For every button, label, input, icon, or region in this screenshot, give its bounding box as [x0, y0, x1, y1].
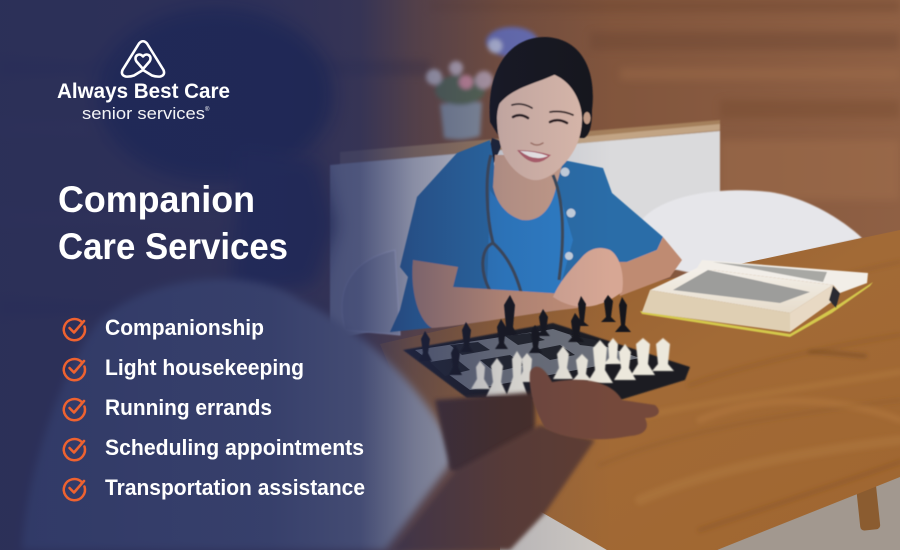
icon: logo triangle with heart — [122, 41, 164, 77]
foreground person — [22, 7, 659, 550]
item: Companionship: Companionship — [105, 315, 264, 340]
white cabinet with shelf — [330, 120, 720, 340]
collar shadow behind neck — [485, 138, 503, 172]
floor — [500, 500, 607, 550]
table with wood grain — [380, 230, 900, 550]
title: Care Services — [58, 226, 288, 267]
logo — [57, 41, 230, 123]
fringe — [492, 48, 588, 115]
hair back — [490, 37, 593, 138]
title — [58, 179, 288, 267]
ear — [584, 112, 590, 124]
clasped hands — [553, 248, 623, 307]
face — [497, 72, 582, 180]
item: Light housekeeping: Light housekeeping — [105, 355, 304, 380]
left dining chair outline — [342, 250, 400, 335]
item: Running errands: Running errands — [105, 395, 272, 420]
far arm — [435, 392, 535, 475]
grey shirt — [22, 279, 457, 550]
registered mark: ® — [205, 106, 210, 113]
black chess pieces — [419, 295, 631, 375]
checklist — [64, 315, 365, 500]
hands — [530, 367, 659, 439]
flower vases — [426, 27, 538, 140]
face and neck — [230, 150, 335, 300]
item: Scheduling appointments: Scheduling appointments — [105, 435, 364, 460]
stethoscope — [483, 155, 562, 292]
inner tee — [487, 185, 573, 295]
forearms — [412, 260, 590, 328]
facial features — [512, 104, 573, 162]
logo tagline: senior services — [82, 105, 205, 123]
near arm — [395, 425, 595, 550]
scrub shirt — [390, 140, 663, 332]
white chess pieces — [471, 338, 674, 397]
white chair — [640, 190, 862, 275]
nurse — [390, 37, 682, 332]
neck — [493, 155, 565, 220]
logo wordmark: Always Best Care — [57, 80, 230, 103]
title: Companion — [58, 179, 255, 220]
buttons — [560, 168, 576, 260]
open book — [640, 260, 873, 337]
chess board — [403, 323, 690, 400]
item: Transportation assistance: Transportation assistance — [105, 475, 365, 500]
head — [97, 7, 333, 183]
